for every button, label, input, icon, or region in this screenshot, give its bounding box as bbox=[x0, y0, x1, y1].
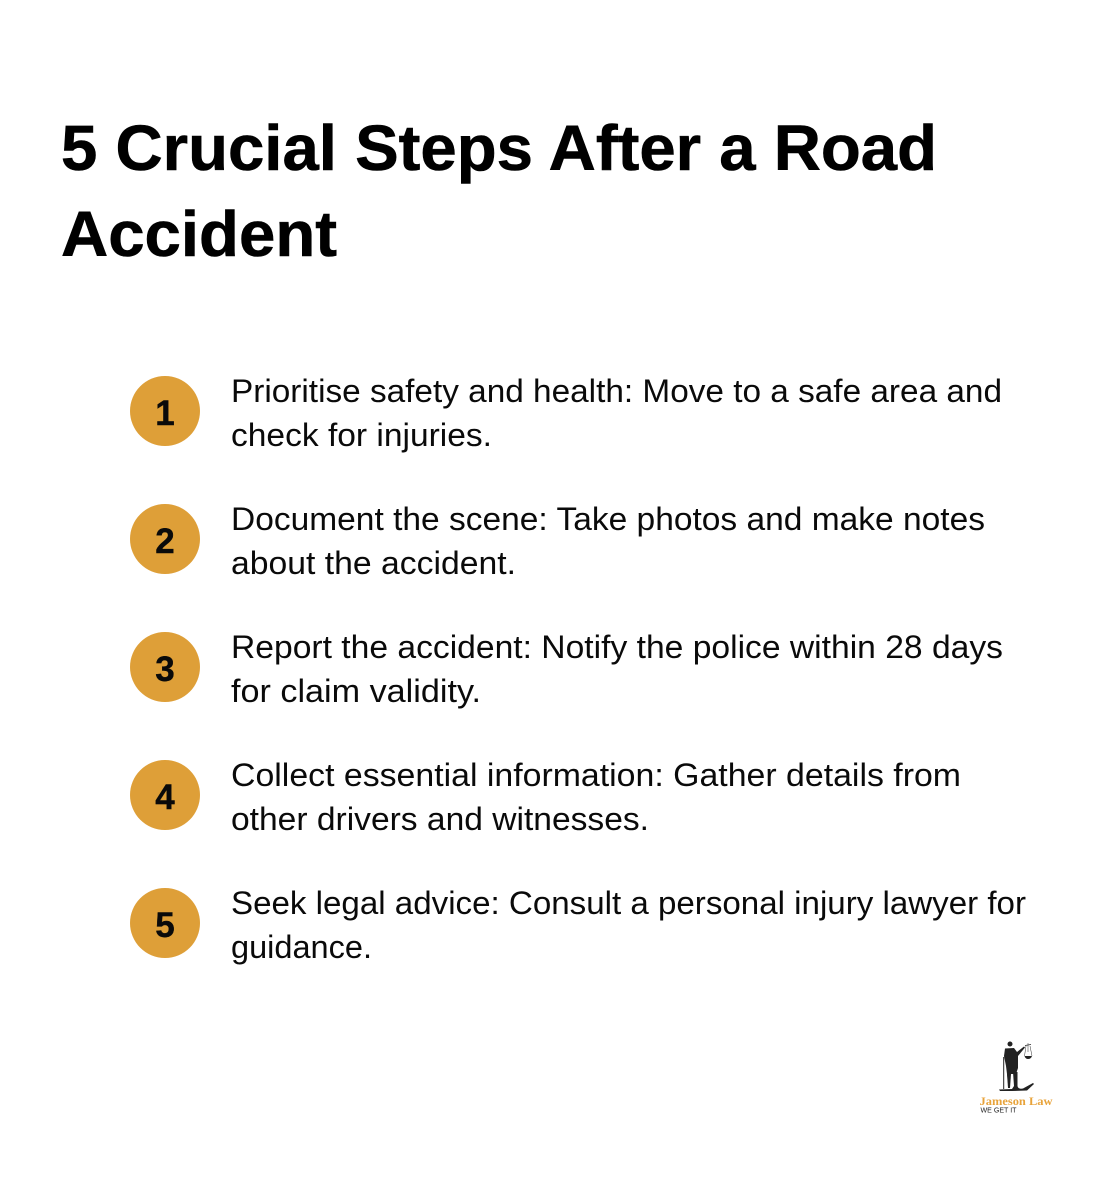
step 1 text bbox=[231, 373, 1002, 453]
number badge 3: 3 bbox=[155, 650, 175, 689]
step 3 text bbox=[231, 629, 1003, 709]
title bbox=[61, 112, 937, 270]
icon: lady justice with L bbox=[999, 1042, 1034, 1091]
step 2 text: Document the scene: Take photos and make notes bbox=[231, 501, 985, 537]
number badge 5: 5 bbox=[155, 906, 175, 945]
step 3 bbox=[130, 629, 1003, 709]
step 1 text: Prioritise safety and health: Move to a safe area and bbox=[231, 373, 1002, 409]
step 1 bbox=[130, 373, 1002, 453]
step 2 text bbox=[231, 501, 985, 581]
number badge 2 bbox=[130, 504, 200, 574]
step 2 bbox=[130, 501, 985, 581]
step 4 text bbox=[231, 757, 961, 837]
step 5 text: guidance. bbox=[231, 929, 372, 965]
title: 5 Crucial Steps After a Road bbox=[61, 112, 937, 184]
number badge 4 bbox=[130, 760, 200, 830]
step 4 text: other drivers and witnesses. bbox=[231, 801, 649, 837]
step 2 text: about the accident. bbox=[231, 545, 516, 581]
step 4 text: Collect essential information: Gather details from bbox=[231, 757, 961, 793]
tagline: WE GET IT bbox=[980, 1108, 1017, 1114]
step 5 bbox=[130, 885, 1026, 965]
step 5 text: Seek legal advice: Consult a personal injury lawyer for bbox=[231, 885, 1026, 921]
step 3 text: Report the accident: Notify the police within 28 days bbox=[231, 629, 1003, 665]
number badge 5 bbox=[130, 888, 200, 958]
step 5 text bbox=[231, 885, 1026, 965]
number badge 2: 2 bbox=[155, 522, 175, 561]
number badge 1: 1 bbox=[155, 394, 175, 433]
number badge 3 bbox=[130, 632, 200, 702]
number badge 4: 4 bbox=[155, 778, 175, 817]
step 1 text: check for injuries. bbox=[231, 417, 492, 453]
number badge 1 bbox=[130, 376, 200, 446]
title: Accident bbox=[61, 198, 337, 270]
brand name: Jameson Law bbox=[980, 1096, 1053, 1108]
step 4 bbox=[130, 757, 961, 837]
step 3 text: for claim validity. bbox=[231, 673, 481, 709]
logo: Jameson Law bbox=[980, 1042, 1053, 1114]
